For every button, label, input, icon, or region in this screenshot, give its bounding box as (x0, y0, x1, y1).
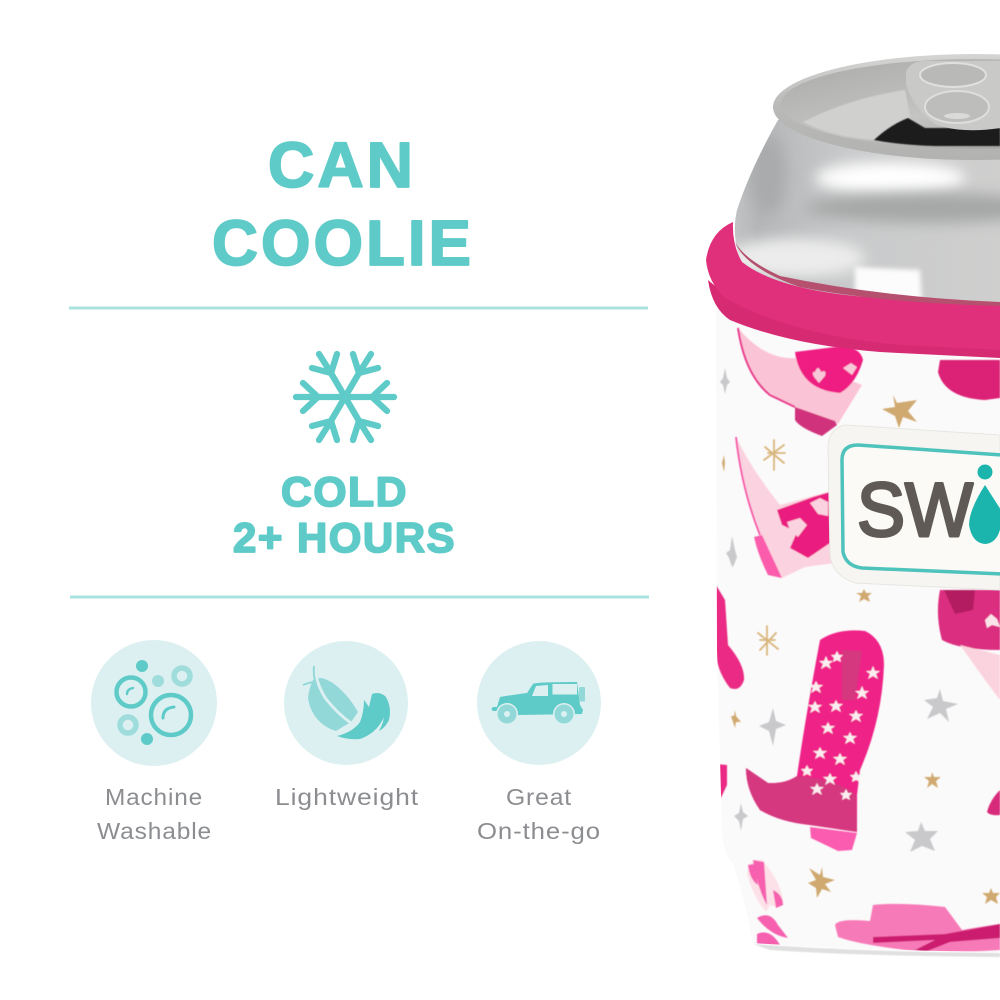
stars: gold (722, 395, 1000, 904)
feature: lightweight (275, 641, 419, 810)
logo letters: SW (857, 468, 973, 553)
sparkles: gold (758, 440, 785, 655)
icon: feather (284, 641, 408, 765)
patch base (828, 425, 1000, 590)
label: great on-the-go (477, 784, 601, 844)
can rim (773, 54, 1000, 160)
boot: top pale pink (738, 328, 863, 436)
icon: bubbles (91, 640, 217, 766)
stars: silver (720, 368, 958, 852)
shape: left edge boot (716, 585, 744, 689)
collar inner shadow (735, 242, 1000, 306)
shape: left edge small boot (720, 764, 728, 800)
title: can coolie: CAN (268, 129, 416, 201)
logo patch (828, 425, 1000, 590)
can shoulder (734, 120, 1000, 302)
feature: machine washable (91, 640, 217, 844)
can lid (781, 59, 1000, 149)
shape: bottom cowboy boot (835, 904, 1000, 952)
collar: sleeve binding (708, 280, 1000, 358)
shape: bottom left boot (747, 860, 788, 945)
label: great on-the-go: Great (506, 784, 572, 810)
label: lightweight: Lightweight (275, 784, 419, 810)
shape: top right hat (938, 360, 1000, 400)
logo drop (969, 464, 1000, 544)
feature: great on-the-go (477, 641, 601, 844)
boots and stars pattern (716, 328, 1000, 952)
icon: snowflake (296, 354, 394, 440)
lid recess (803, 90, 915, 140)
divider top (69, 306, 648, 310)
label: great on-the-go: On-the-go (477, 818, 601, 844)
icon: jeep (477, 641, 601, 765)
label: machine washable: Machine (105, 784, 203, 810)
product: can in coolie (706, 54, 1000, 957)
boot: pale pink with pink shaft (736, 437, 835, 578)
pull tab (906, 61, 1000, 130)
title: can coolie (212, 129, 474, 279)
coolie sleeve body (716, 305, 1000, 952)
label: machine washable (97, 784, 212, 844)
pull opening shadow (874, 118, 1000, 146)
divider bottom (70, 596, 649, 598)
shape: right small boot (987, 790, 1000, 815)
ground shadow (753, 944, 1000, 957)
heading: cold 2+ hours (233, 468, 456, 561)
patch teal border (842, 445, 1000, 574)
heading: cold 2+ hours: COLD (281, 468, 408, 515)
collar: pink rim (706, 222, 1000, 350)
shape: right boot (938, 590, 1000, 700)
boot: star print (746, 630, 884, 851)
label: machine washable: Washable (97, 818, 212, 844)
title: can coolie: COOLIE (212, 207, 474, 279)
heading: cold 2+ hours: 2+ HOURS (233, 514, 456, 561)
